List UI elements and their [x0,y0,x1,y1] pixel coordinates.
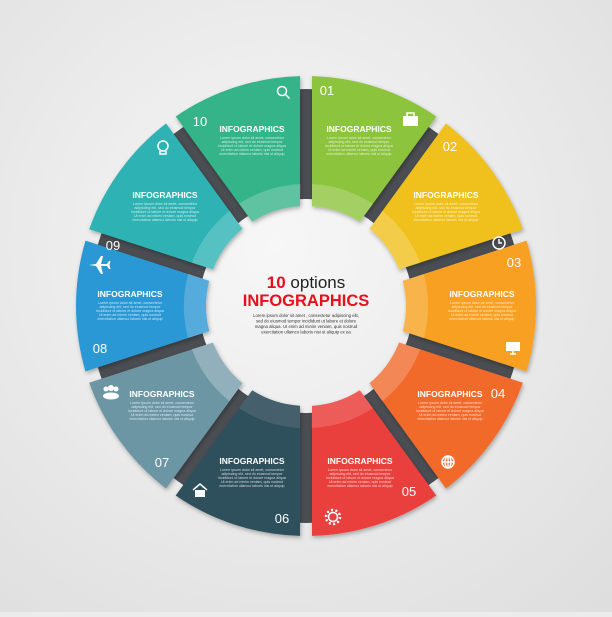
segment labels: INFOGRAPHICS [413,190,479,200]
segment numbers: 06 [275,511,289,526]
segment body text: Ut enim ad minim veniam, quis nostrud [419,413,481,417]
segment body text: Ut enim ad minim veniam, quis nostrud [131,413,193,417]
icon: people [103,385,119,400]
icon: clock [493,237,505,249]
segment body text: adipiscing elit, sed do eiusmod tempor [451,305,513,309]
icon: gear [326,510,340,524]
segment numbers: 10 [193,114,207,129]
segment body text: Lorem ipsum dolor sit amet, consectetur [98,301,163,305]
center body text: magna aliqua. Ut enim ad minim veniam, quis nostrud [255,324,358,329]
segment body text: Lorem ipsum dolor sit amet, consectetur [450,301,515,305]
segment body text: exercitation ullamco laboris nisi ut aliquip [129,417,195,421]
center title: INFOGRAPHICS [243,292,369,310]
segment body text: exercitation ullamco laboris nisi ut aliquip [417,417,483,421]
segment numbers: 08 [93,341,107,356]
segment body text: exercitation ullamco laboris nisi ut aliquip [326,152,392,156]
segment body text: incididunt ut labore et dolore magna aliqua [128,409,196,413]
segment body text: incididunt ut labore et dolore magna aliqua [131,210,199,214]
segment labels: INFOGRAPHICS [219,124,285,134]
segment body text: exercitation ullamco laboris nisi ut aliquip [449,317,515,321]
segment body text: Lorem ipsum dolor sit amet, consectetur [414,202,479,206]
segment body text: adipiscing elit, sed do eiusmod tempor [99,305,161,309]
icon: magnifier [278,86,290,98]
segment body text: adipiscing elit, sed do eiusmod tempor [221,472,283,476]
segment labels [97,124,515,466]
segment body text: Ut enim ad minim veniam, quis nostrud [415,214,477,218]
dark ring underlay [144,144,468,468]
segment body text: Lorem ipsum dolor sit amet, consectetur [130,401,195,405]
segment body text: adipiscing elit, sed do eiusmod tempor [134,206,196,210]
segment numbers: 04 [491,386,505,401]
segment body text: incididunt ut labore et dolore magna aliqua [416,409,484,413]
segment body text: Lorem ipsum dolor sit amet, consectetur [133,202,198,206]
segment labels: INFOGRAPHICS [417,389,483,399]
segment body text: Lorem ipsum dolor sit amet, consectetur [328,468,393,472]
segment body text: adipiscing elit, sed do eiusmod tempor [415,206,477,210]
segment body text: exercitation ullamco laboris nisi ut aliquip [132,218,198,222]
segment labels: INFOGRAPHICS [326,124,392,134]
center body text: exercitation ullamco laboris nisi ut aliquip ex ea [261,330,351,334]
segment body text: Lorem ipsum dolor sit amet, consectetur [220,136,285,140]
icon: lightbulb [158,141,168,154]
segment labels: INFOGRAPHICS [327,456,393,466]
segment body text: Lorem ipsum dolor sit amet, consectetur [327,136,392,140]
segment body text: Ut enim ad minim veniam, quis nostrud [221,480,283,484]
icon: globe [442,456,454,468]
segment body text: exercitation ullamco laboris nisi ut aliquip [327,484,393,488]
segment body text: Ut enim ad minim veniam, quis nostrud [134,214,196,218]
segment numbers: 05 [402,484,416,499]
segment numbers: 03 [507,255,521,270]
segment body text: Ut enim ad minim veniam, quis nostrud [329,480,391,484]
segment body text: exercitation ullamco laboris nisi ut aliquip [413,218,479,222]
segment body text: Ut enim ad minim veniam, quis nostrud [99,313,161,317]
segment body text: Ut enim ad minim veniam, quis nostrud [451,313,513,317]
icon: plane [89,256,110,274]
segment body text: exercitation ullamco laboris nisi ut aliquip [219,152,285,156]
center body text: Lorem ipsum dolor sit amet , consectetur adipiscing elit, [253,313,359,318]
segment body text: incididunt ut labore et dolore magna aliqua [96,309,164,313]
center body text: sed do eiusmod tempor incididunt ut labore et dolore [256,318,357,324]
segment numbers: 01 [320,83,334,98]
segment body text: adipiscing elit, sed do eiusmod tempor [221,140,283,144]
segment labels: INFOGRAPHICS [132,190,198,200]
segment labels: INFOGRAPHICS [97,289,163,299]
segment numbers: 02 [443,139,457,154]
center body text [253,313,359,334]
segment body text: Ut enim ad minim veniam, quis nostrud [221,148,283,152]
segment body text: Ut enim ad minim veniam, quis nostrud [328,148,390,152]
center title [243,273,369,310]
icon: home [193,484,207,497]
icons [89,86,520,524]
segment numbers: 09 [106,238,120,253]
segment body text: adipiscing elit, sed do eiusmod tempor [419,405,481,409]
segment numbers: 07 [155,455,169,470]
segment body text: Lorem ipsum dolor sit amet, consectetur [418,401,483,405]
segment labels: INFOGRAPHICS [129,389,195,399]
center title: 10 options [267,273,345,292]
segment body text: incididunt ut labore et dolore magna aliqua [218,144,286,148]
segment labels: INFOGRAPHICS [449,289,515,299]
segment body text: adipiscing elit, sed do eiusmod tempor [328,140,390,144]
segment numbers [93,83,521,526]
icon: briefcase [403,113,418,126]
segment body text: exercitation ullamco laboris nisi ut aliquip [219,484,285,488]
segment body text [96,136,516,488]
segment body text: exercitation ullamco laboris nisi ut aliquip [97,317,163,321]
segment body text: incididunt ut labore et dolore magna aliqua [448,309,516,313]
segment body text: incididunt ut labore et dolore magna aliqua [218,476,286,480]
ring segments [47,43,565,569]
segment labels: INFOGRAPHICS [219,456,285,466]
icon: monitor [506,342,520,354]
segment body text: incididunt ut labore et dolore magna aliqua [325,144,393,148]
segment body text: Lorem ipsum dolor sit amet, consectetur [220,468,285,472]
segment body text: incididunt ut labore et dolore magna aliqua [326,476,394,480]
segment body text: adipiscing elit, sed do eiusmod tempor [131,405,193,409]
segment body text: incididunt ut labore et dolore magna aliqua [412,210,480,214]
segment body text: adipiscing elit, sed do eiusmod tempor [329,472,391,476]
